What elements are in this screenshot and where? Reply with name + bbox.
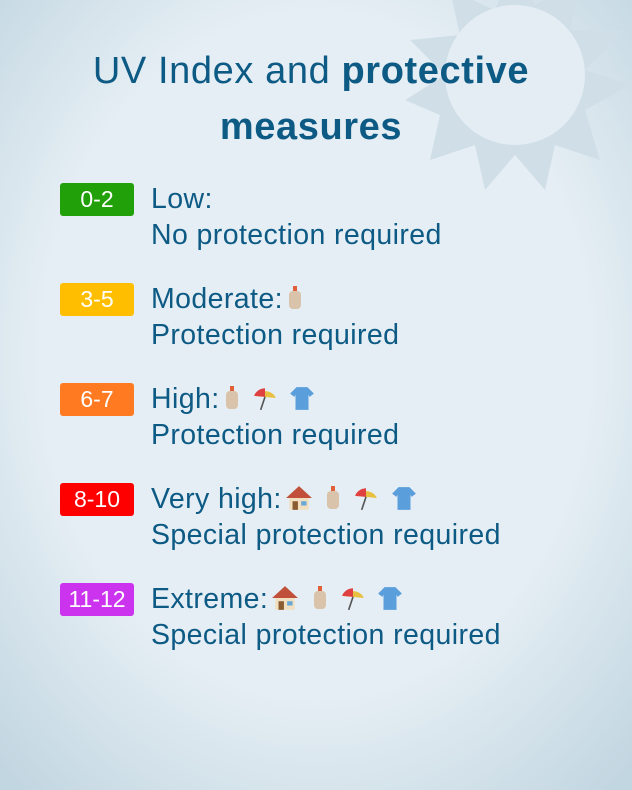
title xyxy=(93,50,529,148)
row: high: 6-7 xyxy=(80,386,114,412)
row: very high xyxy=(60,483,501,551)
row: low: No protection required xyxy=(151,219,442,251)
row: moderate xyxy=(60,283,399,351)
row: very high: Special protection required xyxy=(151,519,501,551)
row: high: Protection required xyxy=(151,419,399,451)
row: extreme: Special protection required xyxy=(151,619,501,651)
row: high xyxy=(60,383,399,451)
row: low xyxy=(60,183,442,251)
row: very high: 8-10 xyxy=(74,486,120,512)
row: extreme: 11-12 xyxy=(68,586,126,612)
title: measures xyxy=(220,106,402,148)
row: extreme xyxy=(60,583,501,651)
title: UV Index and protective xyxy=(93,50,529,92)
row: low: Low: xyxy=(151,183,213,215)
row: extreme: Extreme: xyxy=(151,583,268,615)
row: low: 0-2 xyxy=(80,186,114,212)
row: moderate: Moderate: xyxy=(151,283,283,315)
row: moderate: 3-5 xyxy=(80,286,114,312)
row: very high: Very high: xyxy=(151,483,282,515)
row: high: High: xyxy=(151,383,220,415)
row: moderate: Protection required xyxy=(151,319,399,351)
